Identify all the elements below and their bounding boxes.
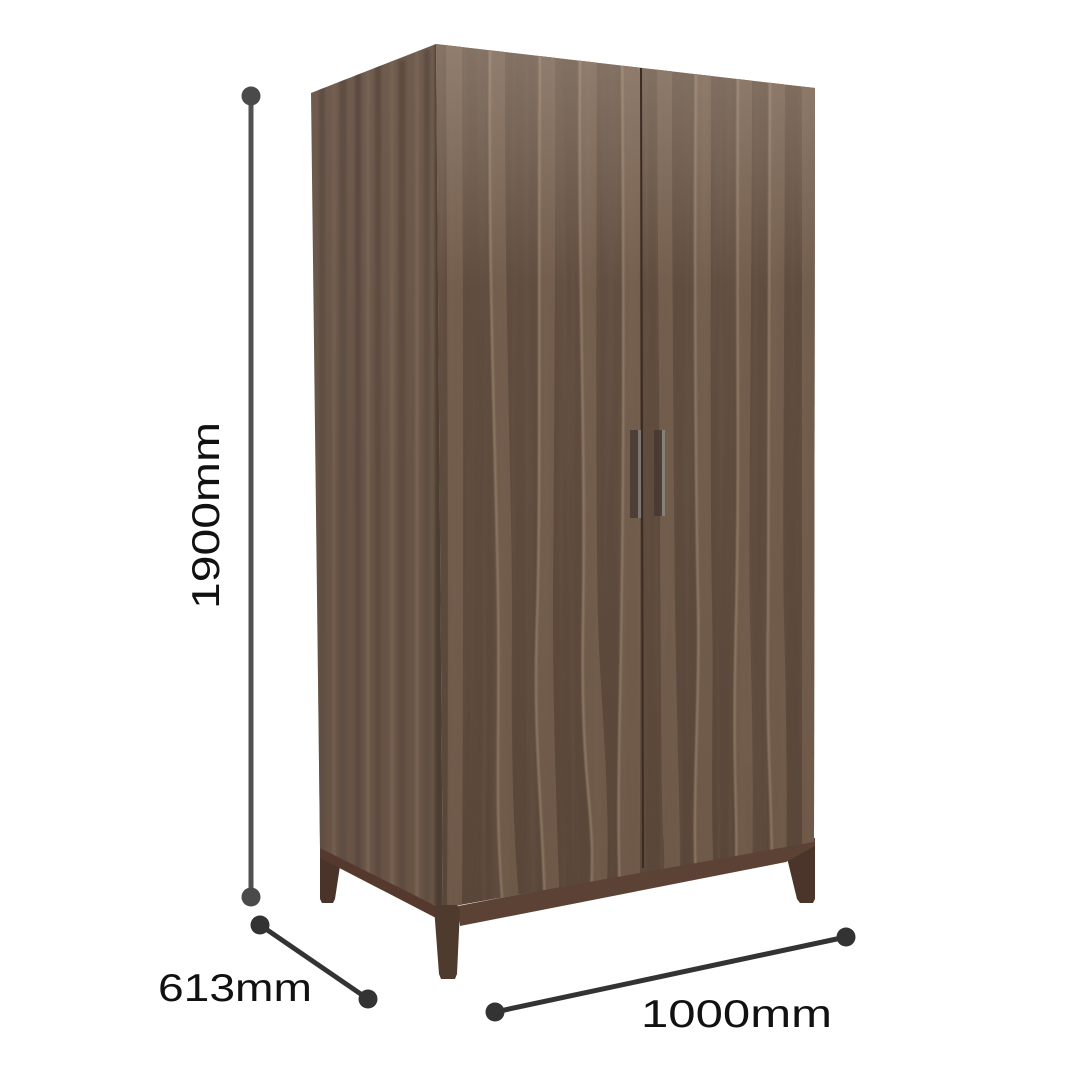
label: height: 1900mm (185, 422, 228, 609)
front leg (434, 905, 460, 979)
base rail: front (458, 838, 815, 926)
dimension: height (242, 86, 260, 906)
front panel (430, 40, 820, 920)
side panel (305, 40, 445, 920)
door handles (630, 430, 665, 518)
top light sheen (436, 44, 815, 278)
wardrobe illustration (305, 40, 820, 979)
infographic: wardrobe with dimensions (160, 44, 856, 1028)
label: depth: 613mm (158, 967, 312, 1010)
back right leg (787, 838, 815, 903)
base rail: side (320, 842, 436, 918)
dimension: width (486, 928, 856, 1022)
wood grain bands (446, 40, 815, 910)
light grain edges (490, 40, 772, 910)
label: width: 1000mm (641, 993, 832, 1036)
dimension: depth (250, 916, 378, 1008)
door gap (641, 68, 643, 868)
back left leg (320, 856, 340, 903)
